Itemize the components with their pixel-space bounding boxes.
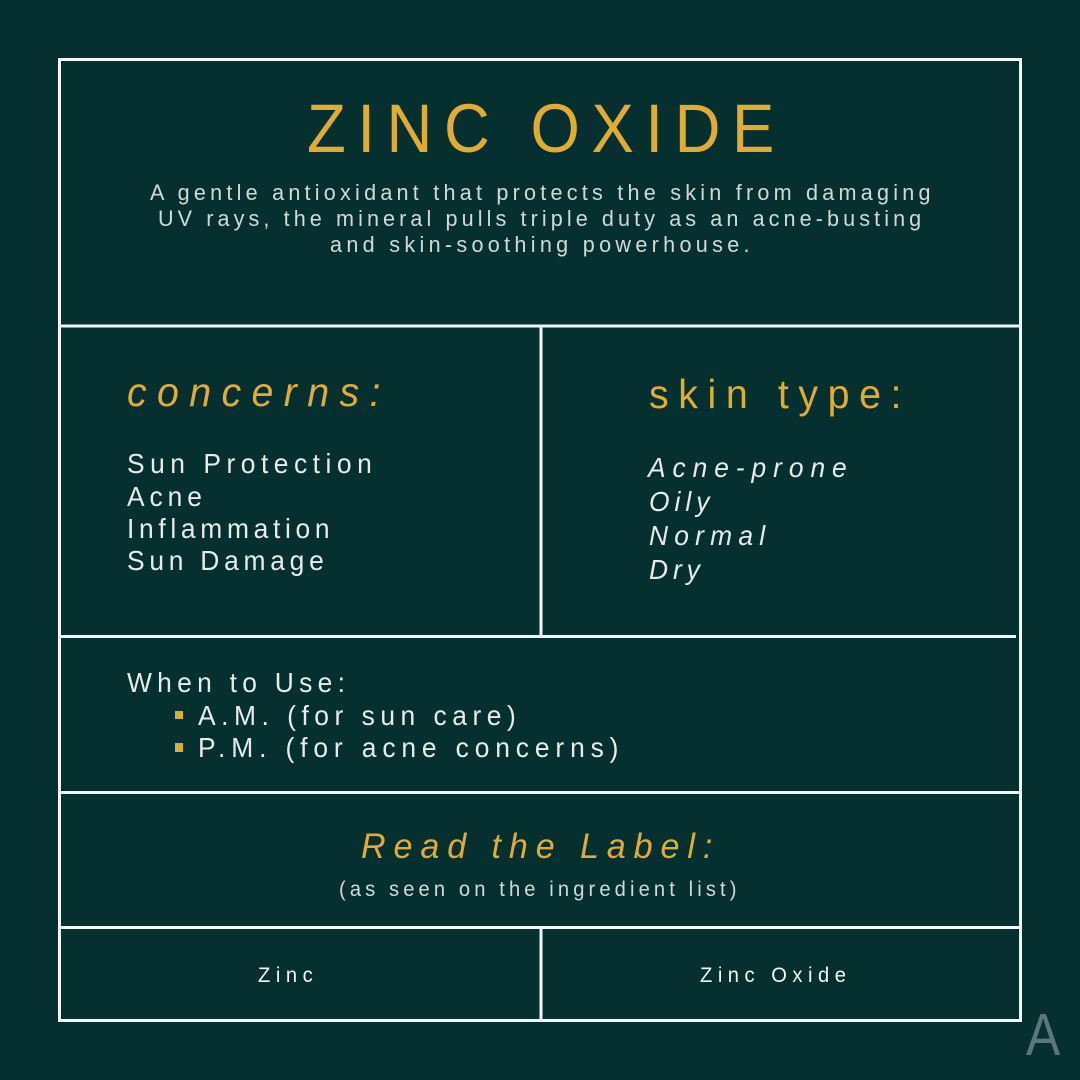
watermark logo: A bbox=[1026, 1002, 1060, 1068]
intro text bbox=[150, 180, 930, 257]
read the label heading: Read the Label: bbox=[361, 827, 712, 866]
skin type list: Dry bbox=[649, 555, 701, 585]
intro text: A gentle antioxidant that protects the skin from damaging bbox=[150, 180, 930, 205]
concerns list: Acne bbox=[127, 482, 202, 512]
concerns list: Inflammation bbox=[127, 514, 330, 544]
concerns list: Sun Protection bbox=[127, 449, 372, 479]
skin type list: Oily bbox=[649, 487, 711, 517]
bullet: P.M.: P.M. (for acne concerns) bbox=[198, 733, 618, 763]
concerns list: Sun Damage bbox=[127, 546, 324, 576]
concerns list bbox=[127, 449, 372, 576]
when to use heading: When to Use: bbox=[127, 668, 345, 698]
panel: read the label bbox=[339, 827, 736, 901]
concerns heading: concerns: bbox=[127, 369, 380, 415]
panel: when to use bbox=[127, 668, 618, 763]
skin type list: Acne-prone bbox=[646, 453, 847, 483]
label name: Zinc Oxide: Zinc Oxide bbox=[700, 964, 846, 987]
frame and grid lines bbox=[60, 60, 1020, 1020]
skin type list bbox=[646, 453, 847, 585]
read the label subtitle: (as seen on the ingredient list) bbox=[339, 878, 736, 901]
panel: skin type bbox=[646, 371, 901, 585]
title: ZINC OXIDE bbox=[307, 91, 774, 168]
intro text: UV rays, the mineral pulls triple duty as an acne-busting bbox=[158, 206, 921, 231]
intro text: and skin-soothing powerhouse. bbox=[330, 232, 750, 257]
bullet: A.M.: A.M. (for sun care) bbox=[198, 701, 516, 731]
skin type heading: skin type: bbox=[649, 371, 901, 417]
panel: concerns bbox=[127, 369, 380, 576]
skin type list: Normal bbox=[649, 521, 766, 551]
label name: Zinc: Zinc bbox=[258, 964, 313, 987]
